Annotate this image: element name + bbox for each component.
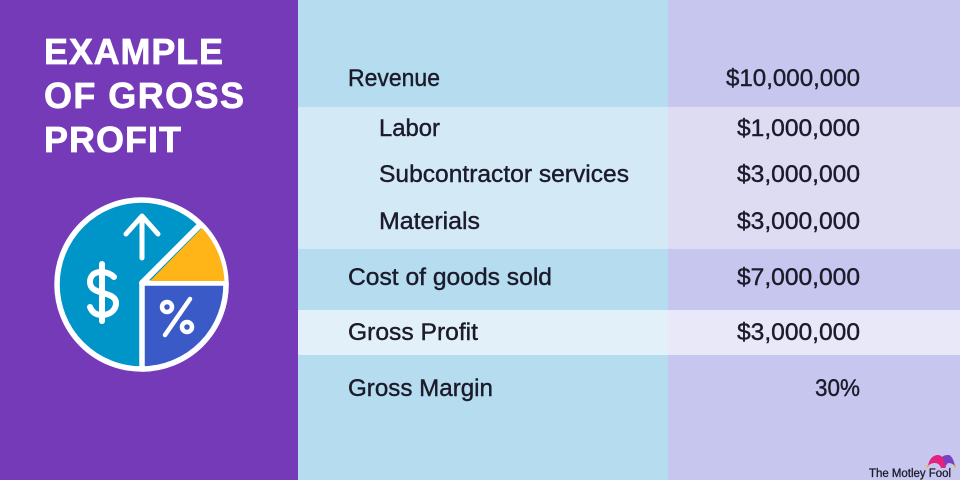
row: subcontractor services: $3,000,000 — [737, 161, 860, 188]
icon: slice divider — [142, 226, 199, 283]
row: gross margin: 30% — [815, 375, 860, 402]
icon: pie chart with dollar, arrow and percent — [57, 200, 226, 369]
row: cost of goods sold: Cost of goods sold — [348, 264, 552, 291]
row: gross margin: Gross Margin — [348, 375, 493, 402]
row: labor: Labor — [379, 115, 440, 142]
icon: percent quadrant — [142, 283, 226, 369]
icon: up arrow — [126, 216, 158, 258]
icon: percent sign — [162, 299, 192, 335]
panel: table label column — [298, 0, 668, 480]
panel: cost breakdown rows band — [298, 107, 960, 249]
panel: table value column — [668, 0, 960, 480]
row: gross profit: Gross Profit — [348, 319, 478, 346]
title: OF GROSS — [44, 75, 244, 116]
row: gross profit: $3,000,000 — [737, 319, 860, 346]
row: labor — [379, 115, 860, 142]
icon: jester hat — [926, 455, 956, 468]
row: subcontractor services: Subcontractor services — [379, 161, 629, 188]
row: cost of goods sold: $7,000,000 — [737, 264, 860, 291]
row: materials: $3,000,000 — [737, 208, 860, 235]
row: labor: $1,000,000 — [737, 115, 860, 142]
logo: The Motley Fool: The Motley Fool — [869, 468, 951, 480]
row: revenue: Revenue — [348, 65, 440, 92]
row: materials: Materials — [379, 208, 480, 235]
row: gross margin — [348, 375, 860, 402]
row: cost of goods sold — [348, 264, 860, 291]
row: revenue — [348, 65, 860, 92]
row: materials — [379, 208, 860, 235]
title — [44, 31, 244, 160]
title: EXAMPLE — [44, 31, 223, 72]
row: subcontractor services — [379, 161, 860, 188]
row: revenue: $10,000,000 — [726, 65, 860, 92]
panel: purple sidebar — [0, 0, 298, 480]
icon: yellow pie slice — [150, 228, 224, 281]
icon: dollar sign — [90, 264, 116, 321]
title: PROFIT — [44, 119, 181, 160]
row: gross profit — [348, 319, 860, 346]
panel: gross profit row band — [298, 310, 960, 355]
logo: The Motley Fool — [869, 455, 956, 480]
